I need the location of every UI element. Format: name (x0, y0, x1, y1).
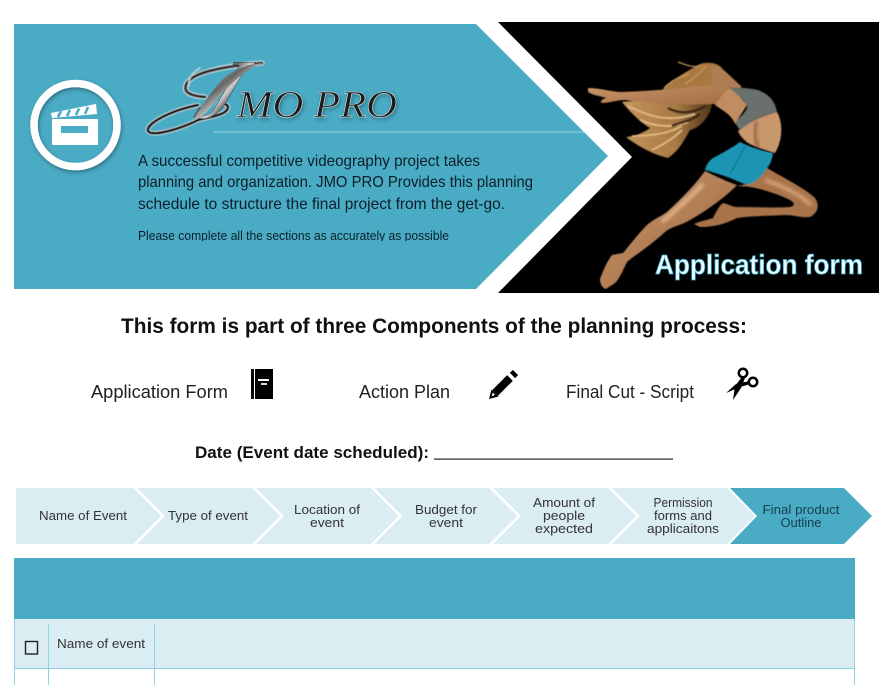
step: amount of people expected: people (543, 508, 585, 523)
lower hair (622, 100, 712, 158)
back leg (694, 168, 818, 227)
icon: book (251, 369, 273, 399)
step: amount of people expected (493, 488, 636, 544)
photo caption: Application form (655, 249, 863, 280)
step: final product outline (730, 488, 872, 544)
table header bar (14, 558, 855, 619)
shorts (705, 142, 773, 184)
icon: scissors (726, 369, 757, 400)
row label: Name of event (57, 636, 145, 651)
neck (712, 66, 742, 92)
teal arrow panel (14, 24, 608, 289)
logo wordmark: MO PRO (236, 84, 397, 126)
arms and shoulder (588, 84, 744, 108)
checkbox (26, 642, 38, 654)
component: application form (91, 369, 273, 402)
step: final product outline: Final product (762, 502, 840, 517)
step: type of event: Type of event (168, 508, 248, 523)
step: budget for event: Budget for (415, 502, 478, 517)
table row: name of event (14, 619, 855, 668)
step: budget for event: event (429, 515, 463, 530)
component: application form: Application Form (91, 382, 228, 402)
banner intro text: A successful competitive videography project takes (138, 153, 480, 170)
banner intro text: schedule to structure the final project from the get-go. (138, 196, 505, 213)
step: name of event (16, 488, 161, 544)
step: amount of people expected: Amount of (533, 495, 595, 510)
step: type of event (137, 488, 280, 544)
step: final product outline: Outline (780, 515, 822, 530)
process chevrons (16, 488, 872, 544)
form table (14, 558, 855, 685)
component: final cut script: Final Cut - Script (566, 382, 694, 402)
banner intro text: planning and organization. JMO PRO Provides this planning (138, 174, 533, 191)
heading: This form is part of three Components of the planning process: (121, 315, 747, 338)
crop top (728, 87, 777, 130)
icon: clapperboard in ring (34, 84, 117, 166)
step: permission forms (612, 488, 755, 544)
step: location of event: Location of (294, 502, 360, 517)
banner rule (213, 132, 585, 133)
banner intro text (138, 153, 533, 213)
upper hair (660, 63, 722, 92)
step: budget for event (374, 488, 517, 544)
component: final cut script (566, 369, 757, 402)
date field: Date (Event date scheduled): (195, 443, 429, 462)
logo letter J: J (184, 43, 264, 137)
torso (715, 88, 747, 124)
photo panel: dancer on black (498, 22, 879, 293)
step: permission forms: forms and (654, 508, 712, 523)
step: location of event: event (310, 515, 344, 530)
step: amount of people expected: expected (535, 521, 593, 536)
front leg (600, 171, 737, 289)
panel: header banner (14, 22, 879, 293)
step: location of event (256, 488, 399, 544)
component: action plan: Action Plan (359, 382, 450, 402)
icon: pencil (489, 372, 516, 399)
logo: JMO PRO (148, 43, 397, 137)
step: permission forms: Permission (654, 495, 712, 510)
banner note: Please complete all the sections as accurately as possible (138, 229, 449, 243)
step: permission forms: applicaitons (647, 521, 720, 536)
component: action plan (359, 372, 516, 402)
step: name of event: Name of Event (39, 508, 127, 523)
